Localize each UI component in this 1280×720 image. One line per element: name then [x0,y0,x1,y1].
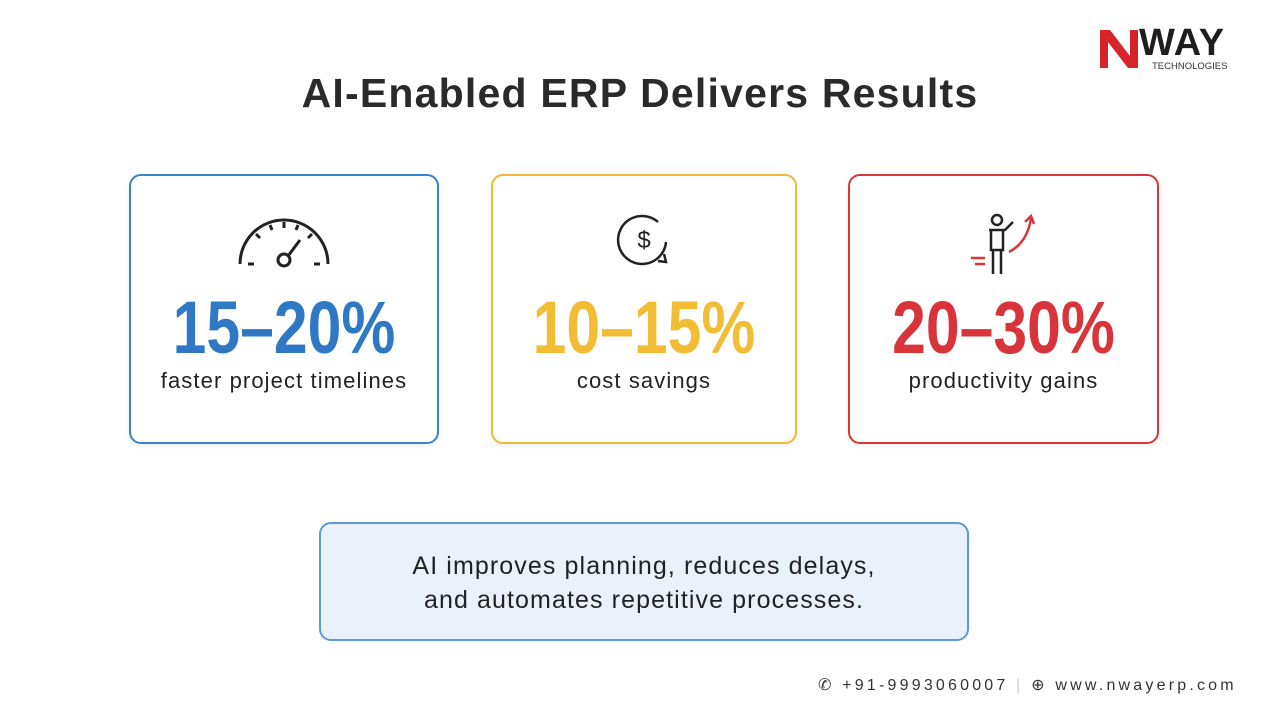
footer: contact: ✆ +91-9993060007 | ⊕ www.nwayerp.com [818,677,1237,694]
logo: WAY [1139,22,1225,64]
label: faster project timelines [161,368,407,393]
number: 10–15% [533,286,755,369]
label: cost savings [577,368,711,393]
logo: TECHNOLOGIES [1152,61,1228,72]
callout: AI improves planning, reduces delays, [412,552,876,580]
icon: speedometer [238,218,330,268]
card: timelines [129,174,439,444]
label: productivity gains [909,368,1098,393]
title: AI-Enabled ERP Delivers Results [302,70,978,116]
icon: dollar cycle [616,214,668,266]
callout [319,522,969,641]
number: 15–20% [173,286,395,369]
logo [1100,22,1228,72]
number: 20–30% [892,286,1115,369]
icon: dollar cycle: $ [637,227,651,254]
card: productivity [848,174,1159,444]
card: cost [491,174,797,444]
callout: and automates repetitive processes. [424,586,864,614]
icon: person with arrow [971,214,1036,274]
